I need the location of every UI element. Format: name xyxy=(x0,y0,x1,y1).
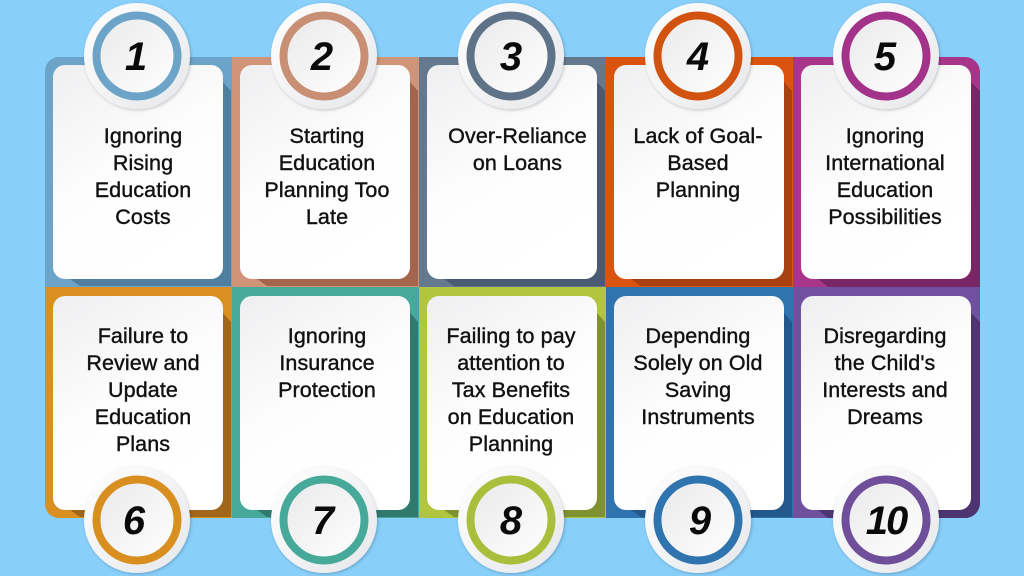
panel 7: Ignoring Insurance Protection: Ignoring xyxy=(288,324,366,348)
panel 10: Disregarding the Child's Interests and Dreams: Interests and xyxy=(822,378,948,402)
panel 6: Failure to Review and Update Education Plans: Failure to xyxy=(98,324,188,348)
badge 6 xyxy=(84,467,190,573)
badge 7: 7 xyxy=(312,499,336,543)
badge 1 xyxy=(84,3,190,109)
panel 3: Over-Reliance on Loans: on Loans xyxy=(473,151,562,175)
panel 5: Ignoring International Education Possibilities: Ignoring xyxy=(846,124,924,148)
panel 8: Failing to pay attention to Tax Benefits on Education Planning: on Education xyxy=(448,405,574,429)
panel 6: Failure to Review and Update Education Plans: Update xyxy=(108,378,178,402)
panel 2: Starting Education Planning Too Late: Planning Too xyxy=(264,178,390,202)
panel 2: Starting Education Planning Too Late xyxy=(232,57,419,287)
panel 8: Failing to pay attention to Tax Benefits on Education Planning: Tax Benefits xyxy=(452,378,570,402)
panel 2: Starting Education Planning Too Late: Starting xyxy=(290,124,364,148)
panel 1: Ignoring Rising Education Costs: Ignoring xyxy=(104,124,182,148)
badge 3 xyxy=(458,3,564,109)
badge 5 xyxy=(833,3,939,109)
panel 4: Lack of Goal-Based Planning xyxy=(606,57,793,287)
panel 8: Failing to pay attention to Tax Benefits on Education Planning: attention to xyxy=(457,351,565,375)
panel 8: Failing to pay attention to Tax Benefits on Education Planning: Planning xyxy=(469,432,553,456)
badge 4 xyxy=(645,3,751,109)
panel 8: Failing to pay attention to Tax Benefits on Education Planning: Failing to pay xyxy=(446,324,576,348)
badge 2 xyxy=(271,3,377,109)
badge 10: 10 xyxy=(866,499,908,543)
panel 9: Depending Solely on Old Saving Instruments: Instruments xyxy=(641,405,755,429)
panel 5: Ignoring International Education Possibilities: Education xyxy=(837,178,933,202)
panel 5: Ignoring International Education Possibilities xyxy=(793,57,980,287)
panel 7: Ignoring Insurance Protection: Protection xyxy=(278,378,376,402)
badge 9 xyxy=(645,467,751,573)
panel 7: Ignoring Insurance Protection: Insurance xyxy=(279,351,375,375)
panel 2: Starting Education Planning Too Late: Late xyxy=(306,205,348,229)
panel 10: Disregarding the Child's Interests and Dreams: the Child's xyxy=(835,351,935,375)
badge 2: 2 xyxy=(310,35,333,79)
panel 1: Ignoring Rising Education Costs xyxy=(45,57,232,287)
panel 5: Ignoring International Education Possibilities: Possibilities xyxy=(828,205,942,229)
panel 4: Lack of Goal-Based Planning: Planning xyxy=(656,178,740,202)
badge 9: 9 xyxy=(689,499,712,543)
panel 9: Depending Solely on Old Saving Instruments: Solely on Old xyxy=(633,351,763,375)
panel 9: Depending Solely on Old Saving Instruments xyxy=(606,287,793,518)
badge 3: 3 xyxy=(500,35,522,79)
panel 3: Over-Reliance on Loans xyxy=(419,57,606,287)
badge 10 xyxy=(833,467,939,573)
panel 9: Depending Solely on Old Saving Instruments: Depending xyxy=(646,324,750,348)
panel 4: Lack of Goal-Based Planning: Based xyxy=(667,151,729,175)
badge 4: 4 xyxy=(686,35,709,79)
panel 1: Ignoring Rising Education Costs: Rising xyxy=(113,151,173,175)
panel 6: Failure to Review and Update Education Plans xyxy=(45,287,232,518)
badge 8: 8 xyxy=(500,499,523,543)
panel 10: Disregarding the Child's Interests and Dreams: Disregarding xyxy=(823,324,947,348)
badge 1: 1 xyxy=(125,35,147,79)
panel 5: Ignoring International Education Possibilities: International xyxy=(825,151,945,175)
panel 8: Failing to pay attention to Tax Benefits on Education Planning xyxy=(419,287,606,518)
badge 8 xyxy=(458,467,564,573)
panel 4: Lack of Goal-Based Planning: Lack of Goal- xyxy=(633,124,763,148)
panel 1: Ignoring Rising Education Costs: Education xyxy=(95,178,191,202)
panel 3: Over-Reliance on Loans: Over-Reliance xyxy=(448,124,587,148)
badge 7 xyxy=(271,467,377,573)
panel 6: Failure to Review and Update Education Plans: Review and xyxy=(86,351,200,375)
panel 6: Failure to Review and Update Education Plans: Plans xyxy=(116,432,170,456)
panel 6: Failure to Review and Update Education Plans: Education xyxy=(95,405,191,429)
badge 6: 6 xyxy=(123,499,146,543)
panel 9: Depending Solely on Old Saving Instruments: Saving xyxy=(665,378,731,402)
badge 5: 5 xyxy=(874,35,897,79)
panel 10: Disregarding the Child's Interests and Dreams: Dreams xyxy=(847,405,923,429)
panel 7: Ignoring Insurance Protection xyxy=(232,287,419,518)
panel 2: Starting Education Planning Too Late: Education xyxy=(279,151,375,175)
panel 10: Disregarding the Child's Interests and Dreams xyxy=(793,287,980,518)
panel 1: Ignoring Rising Education Costs: Costs xyxy=(115,205,171,229)
